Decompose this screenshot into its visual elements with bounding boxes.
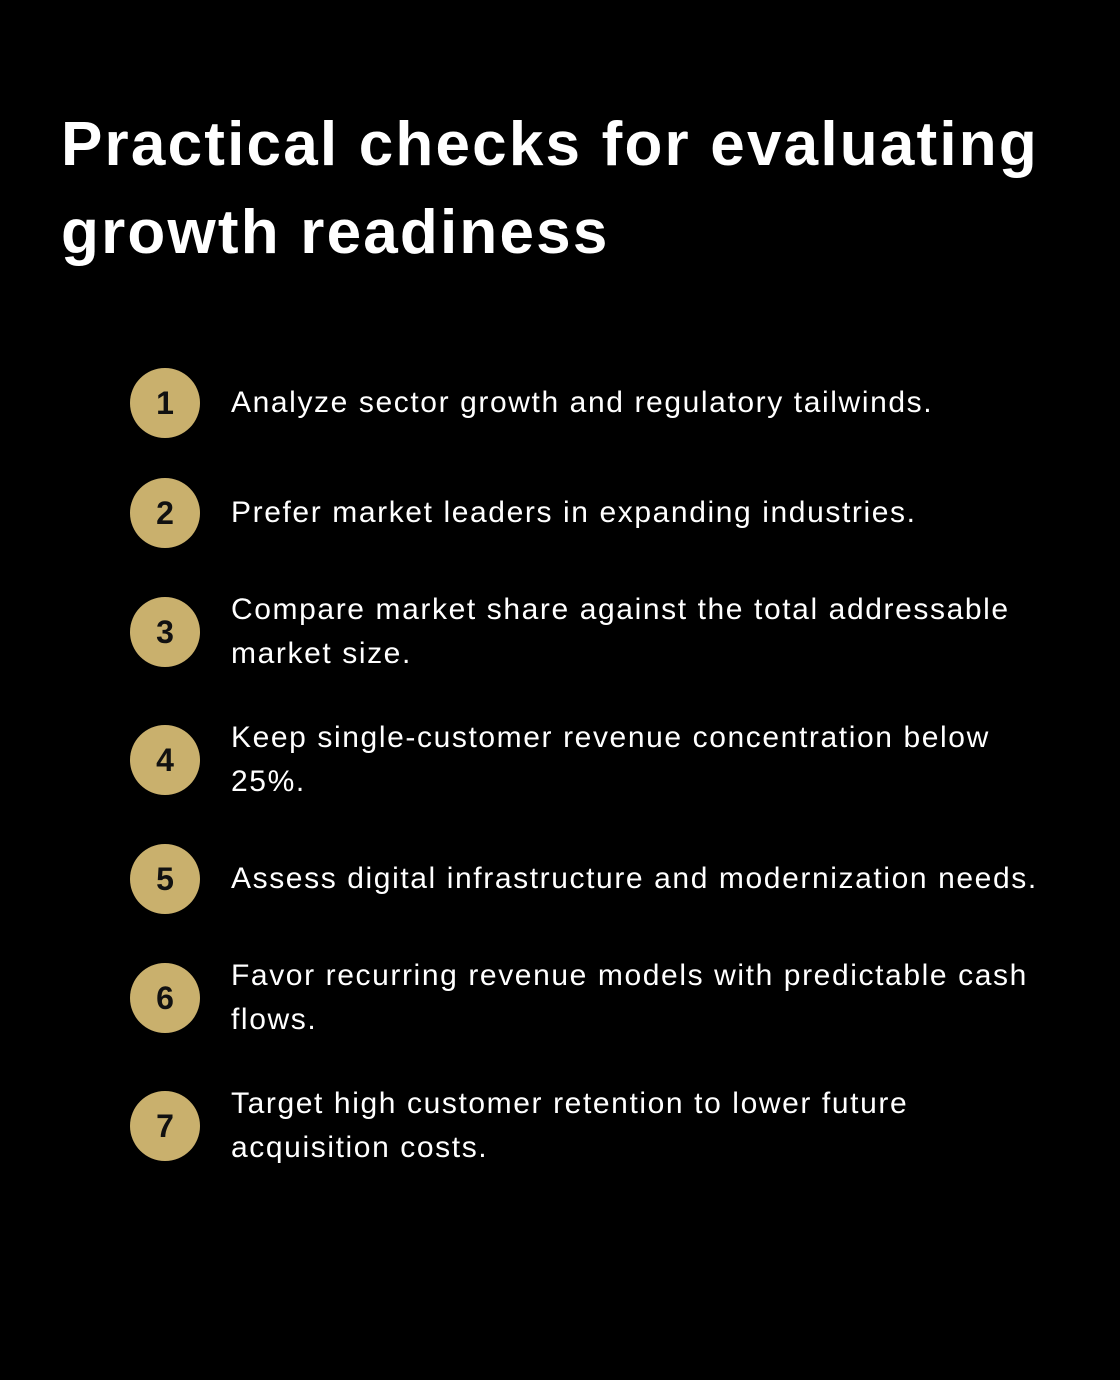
item 5 <box>130 844 1038 914</box>
item 4: 4 <box>156 742 174 778</box>
item 1: 1 <box>156 385 174 421</box>
title <box>61 110 1039 267</box>
item 2 <box>130 478 917 548</box>
item 4: Keep single-customer revenue concentration below <box>231 721 990 754</box>
item 6: flows. <box>231 1003 317 1036</box>
item 5: 5 <box>156 861 174 897</box>
item 6: Favor recurring revenue models with predictable cash <box>231 959 1028 992</box>
title: Practical checks for evaluating <box>61 110 1039 179</box>
item 2: 2 <box>156 495 174 531</box>
item 6 <box>130 959 1028 1036</box>
title: growth readiness <box>61 198 610 267</box>
item 7: 7 <box>156 1108 174 1144</box>
item 3 <box>130 593 1010 670</box>
item 7: acquisition costs. <box>231 1131 488 1164</box>
item 6: 6 <box>156 980 174 1016</box>
item 3: Compare market share against the total addressable <box>231 593 1010 626</box>
item 5: Assess digital infrastructure and modernization needs. <box>231 862 1038 895</box>
item 1: Analyze sector growth and regulatory tailwinds. <box>231 386 933 419</box>
item 3: market size. <box>231 637 412 670</box>
item 7 <box>130 1087 908 1164</box>
item 4 <box>130 721 990 798</box>
item 3: 3 <box>156 614 174 650</box>
item 7: Target high customer retention to lower future <box>231 1087 908 1120</box>
item 2: Prefer market leaders in expanding industries. <box>231 496 917 529</box>
item 1 <box>130 368 933 438</box>
item 4: 25%. <box>231 765 306 798</box>
